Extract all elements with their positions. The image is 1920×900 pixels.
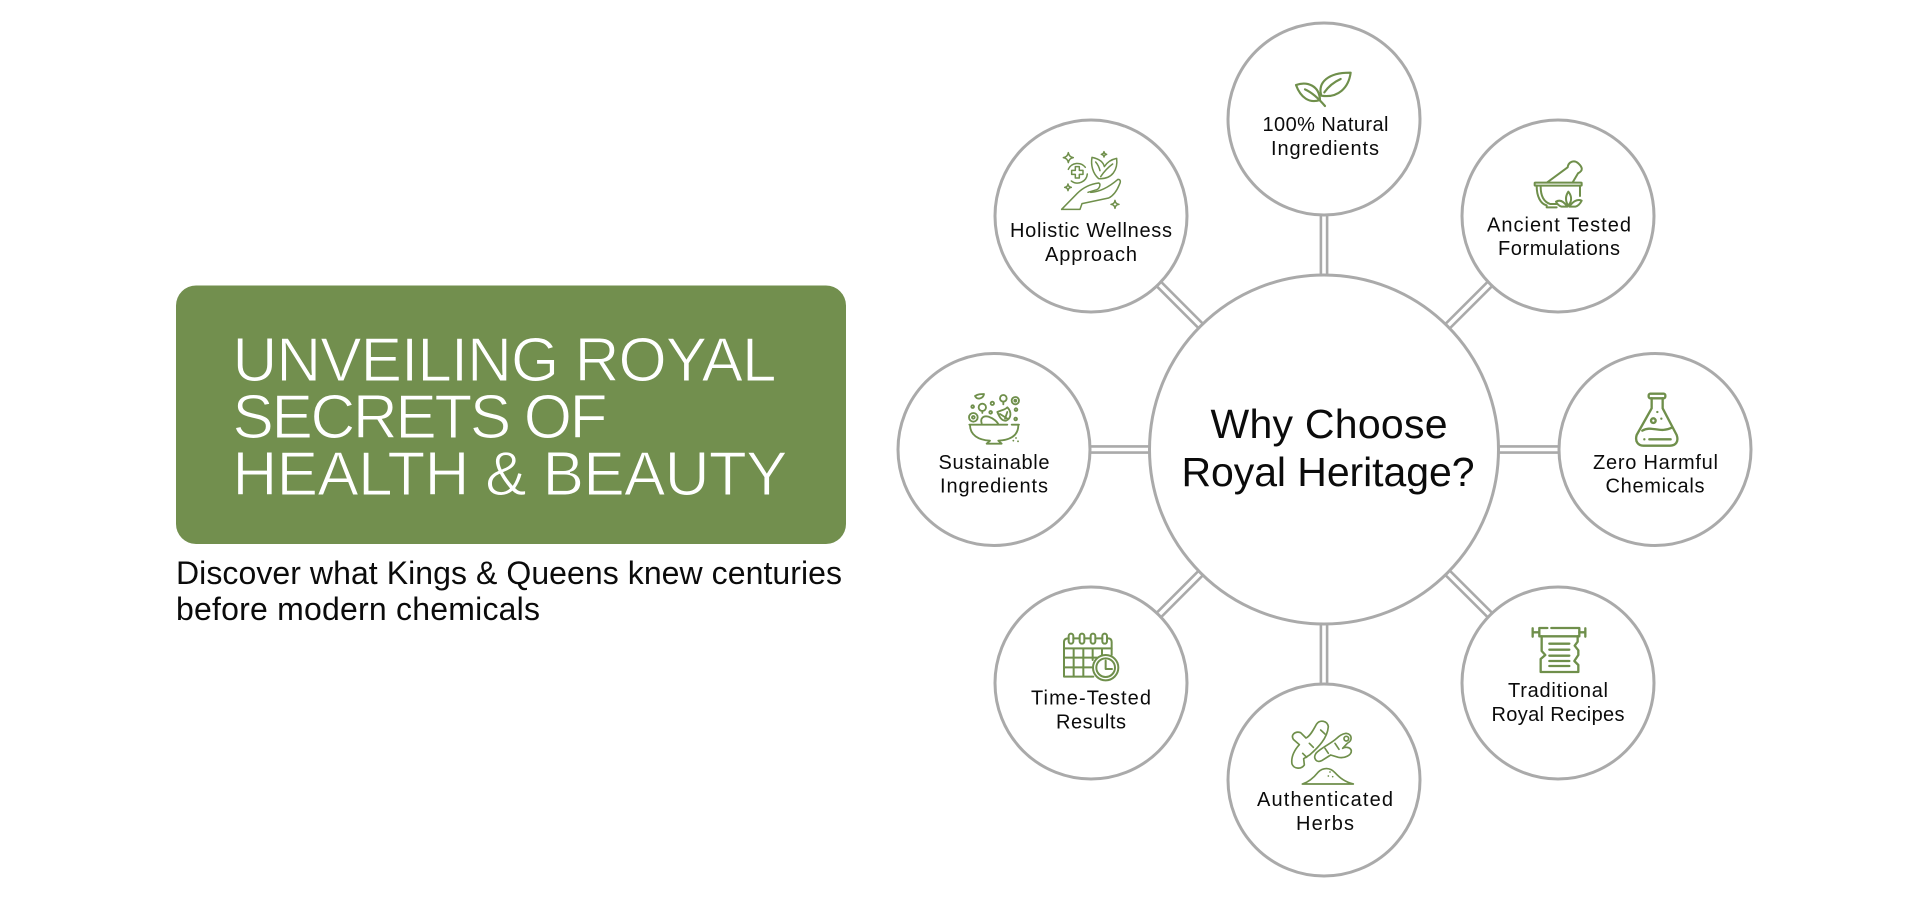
subtitle: before modern chemicals [176, 591, 540, 627]
icon: leaves [1296, 73, 1351, 106]
icon: turmeric roots and powder [1292, 721, 1353, 784]
node: Ancient Tested Formulations: Formulations [1498, 238, 1620, 260]
center circle: Why Choose Royal Heritage?: Why Choose [1210, 401, 1448, 447]
node: 100% Natural Ingredients: 100% Natural [1262, 114, 1388, 136]
node: Time-Tested Results [995, 587, 1187, 779]
icon: mortar and pestle [1535, 161, 1582, 207]
subtitle: Discover what Kings & Queens knew centuries [176, 555, 842, 591]
node: Authenticated Herbs: Herbs [1296, 813, 1354, 835]
icon: scroll [1533, 628, 1585, 672]
title panel [176, 286, 846, 544]
icon: lab flask [1636, 394, 1677, 446]
icon: hand with leaf and cross [1062, 152, 1120, 209]
node: Ancient Tested Formulations: Ancient Tested [1487, 214, 1631, 236]
node: Traditional Royal Recipes [1462, 587, 1654, 779]
title heading: UNVEILING ROYAL [232, 326, 776, 395]
connectors [994, 119, 1655, 780]
node: Zero Harmful Chemicals: Zero Harmful [1593, 452, 1718, 474]
node: Zero Harmful Chemicals: Chemicals [1606, 476, 1704, 498]
center circle: Why Choose Royal Heritage? [1150, 275, 1498, 624]
node: Sustainable Ingredients [898, 354, 1090, 546]
node: Ancient Tested Formulations [1462, 120, 1654, 312]
title heading: SECRETS OF [232, 383, 608, 452]
node: Zero Harmful Chemicals [1559, 354, 1751, 546]
icon: salad bowl [969, 394, 1019, 444]
node: Authenticated Herbs [1228, 684, 1420, 876]
node: Authenticated Herbs: Authenticated [1257, 789, 1393, 811]
node: Holistic Wellness Approach: Holistic Wellness [1010, 220, 1172, 242]
node: Traditional Royal Recipes: Royal Recipes [1492, 704, 1624, 726]
node: Time-Tested Results: Results [1056, 712, 1126, 734]
node: Time-Tested Results: Time-Tested [1031, 688, 1151, 710]
title heading: HEALTH & BEAUTY [232, 440, 788, 509]
title heading [232, 326, 788, 509]
node: Holistic Wellness Approach: Approach [1045, 244, 1137, 266]
node: Sustainable Ingredients: Sustainable [938, 452, 1050, 474]
node: 100% Natural Ingredients: Ingredients [1271, 138, 1379, 160]
node: 100% Natural Ingredients [1228, 23, 1420, 215]
node: Sustainable Ingredients: Ingredients [940, 476, 1048, 498]
center circle: Why Choose Royal Heritage?: Royal Heritage? [1182, 449, 1474, 495]
node: Traditional Royal Recipes: Traditional [1508, 680, 1608, 702]
icon: calendar with clock [1064, 634, 1118, 680]
node: Holistic Wellness Approach [995, 120, 1187, 312]
subtitle [176, 555, 842, 627]
